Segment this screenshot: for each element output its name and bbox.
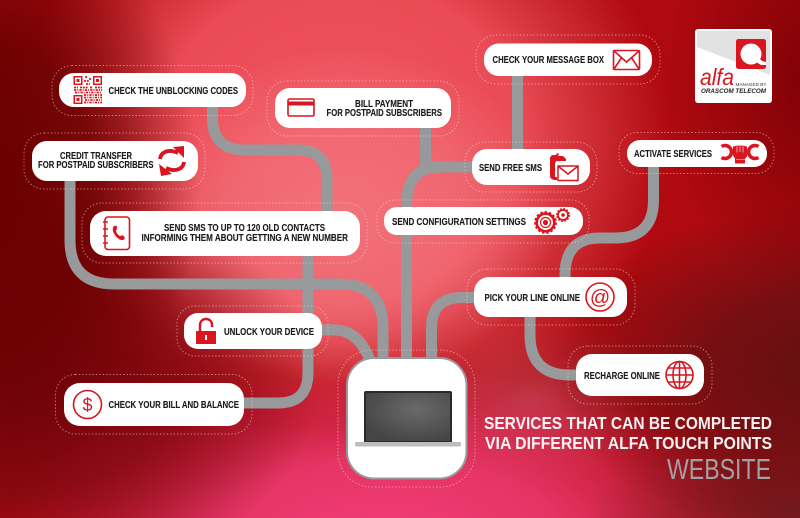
panel: credit transfer: FOR POSTPAID SUBSCRIBERS <box>38 160 154 171</box>
label: CREDIT TRANSFER <box>60 151 133 162</box>
logo: MANAGED BY <box>736 82 766 87</box>
title <box>484 413 772 486</box>
panel: send SMS to old contacts: INFORMING THEM ABOUT GETTING A NEW NUMBER <box>142 233 349 244</box>
label: BILL PAYMENT <box>355 99 413 110</box>
label: RECHARGE ONLINE <box>584 371 660 382</box>
title: SERVICES THAT CAN BE COMPLETED <box>484 413 772 433</box>
panel: credit transfer <box>24 133 205 189</box>
label: UNLOCK YOUR DEVICE <box>224 327 314 338</box>
panel: recharge online <box>568 346 712 404</box>
panel: send configuration settings <box>377 200 589 243</box>
icon: envelope <box>614 50 640 70</box>
icon: phone and envelope <box>550 153 578 180</box>
panel: send free SMS <box>465 142 597 192</box>
panel: bill payment: FOR POSTPAID SUBSCRIBERS <box>326 108 442 119</box>
panel: laptop <box>338 350 475 487</box>
icon: wrench and fist <box>722 146 758 164</box>
panel: check your message box <box>476 35 660 84</box>
logo: alfa <box>700 64 734 90</box>
icon: at sign: @ <box>590 287 610 309</box>
label: CHECK THE UNBLOCKING CODES <box>108 86 238 97</box>
icon: laptop <box>355 391 461 446</box>
label: ACTIVATE SERVICES <box>634 149 712 160</box>
icon: gears <box>535 209 569 233</box>
panel: pick your line online <box>467 269 635 325</box>
icon: refresh arrows <box>159 146 184 176</box>
logo: ORASCOM TELECOM <box>701 88 767 95</box>
panel: unlock your device <box>177 306 328 356</box>
icon: open padlock <box>196 319 216 344</box>
icon: credit card <box>288 99 314 116</box>
logo <box>695 29 772 103</box>
icon: globe <box>666 362 693 388</box>
icon: address book <box>103 217 130 250</box>
panel: send SMS to old contacts <box>82 203 367 263</box>
title: VIA DIFFERENT ALFA TOUCH POINTS <box>485 433 772 453</box>
label: PICK YOUR LINE ONLINE <box>484 293 580 304</box>
panel: bill payment <box>267 81 459 136</box>
label: SEND SMS TO UP TO 120 OLD CONTACTS <box>164 223 325 234</box>
icon: QR code <box>74 76 102 104</box>
label: CHECK YOUR MESSAGE BOX <box>492 55 604 66</box>
panel: check your bill and balance <box>56 374 252 434</box>
icon: dollar: $ <box>82 395 93 415</box>
panel: activate services <box>619 132 774 174</box>
label: CHECK YOUR BILL AND BALANCE <box>108 400 239 411</box>
icon: dollar <box>74 390 102 418</box>
connector lines <box>70 72 654 403</box>
label: SEND FREE SMS <box>479 163 542 174</box>
subtitle: WEBSITE <box>667 454 771 486</box>
panel: check the unblocking codes <box>52 66 253 116</box>
label: SEND CONFIGURATION SETTINGS <box>392 217 526 228</box>
icon: at sign <box>586 283 614 311</box>
